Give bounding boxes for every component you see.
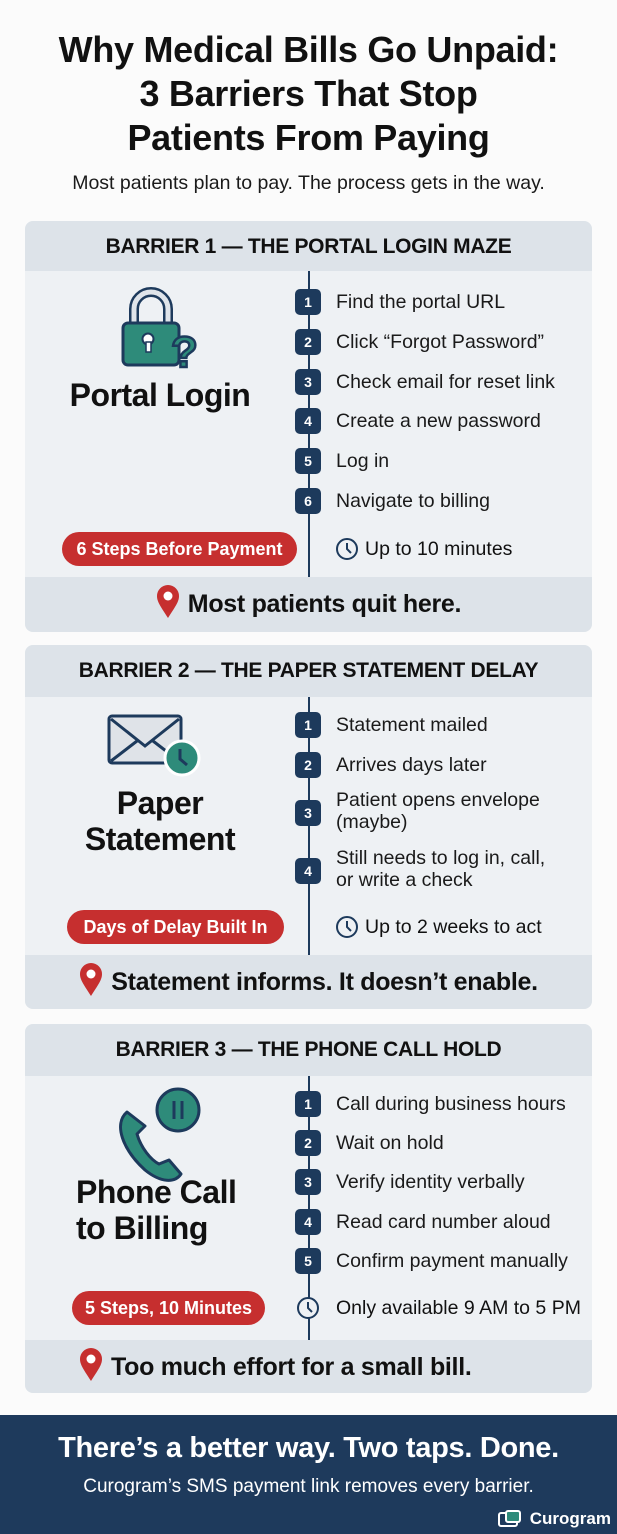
steps list: Confirm payment manually [336, 1250, 568, 1272]
steps list: 5 [304, 453, 312, 469]
heading: barrier 1 [25, 221, 592, 271]
steps list: Click “Forgot Password” [336, 331, 544, 353]
panel: barrier 1 [25, 221, 592, 632]
steps list [295, 712, 545, 891]
steps list: Read card number aloud [336, 1211, 551, 1233]
subtitle: Most patients plan to pay. The process gets in the way. [72, 172, 545, 194]
steps list: Check email for reset link [336, 371, 555, 393]
steps list: 3 [304, 1174, 312, 1190]
title: 3 Barriers That Stop [139, 73, 478, 114]
steps list: Still needs to log in, call, [336, 847, 545, 869]
panel: barrier 3: Only available 9 AM to 5 PM [336, 1297, 581, 1319]
steps list: Verify identity verbally [336, 1171, 525, 1193]
steps list: 4 [304, 413, 312, 429]
label: Paper Statement: Paper [117, 785, 203, 821]
label: Phone Call to Billing: Phone Call [76, 1174, 236, 1210]
steps list: Call during business hours [336, 1093, 566, 1115]
footer: too much effort [25, 1340, 592, 1393]
steps list: Navigate to billing [336, 490, 490, 512]
steps list: Create a new password [336, 410, 541, 432]
footer headline: There’s a better way. Two taps. Done. [58, 1432, 559, 1464]
icon: phone with pause [119, 1088, 200, 1182]
panel: barrier 2: Up to 2 weeks to act [365, 916, 542, 938]
steps list [295, 1091, 568, 1274]
footer: statement informs [25, 955, 592, 1009]
steps list: 2 [304, 757, 312, 773]
steps list [295, 289, 555, 514]
pill: days of delay [67, 910, 284, 944]
heading: barrier 1: BARRIER 1 — THE PORTAL LOGIN MAZE [106, 235, 511, 258]
steps list: 3 [304, 374, 312, 390]
heading: barrier 3 [25, 1024, 592, 1076]
pill: 5 steps [72, 1291, 265, 1325]
panel: barrier 2 [25, 645, 592, 1009]
footer: quit here: Most patients quit here. [188, 590, 461, 618]
pill: 6 steps: 6 Steps Before Payment [76, 539, 283, 559]
steps list: 6 [304, 493, 312, 509]
steps list: 3 [304, 805, 312, 821]
footer banner [0, 1415, 617, 1534]
label: Paper Statement: Statement [85, 821, 235, 857]
steps list: 2 [304, 334, 312, 350]
steps list: Statement mailed [336, 714, 488, 736]
steps list: 4 [304, 1214, 312, 1230]
heading: barrier 3: BARRIER 3 — THE PHONE CALL HOLD [116, 1038, 501, 1061]
heading: barrier 2: BARRIER 2 — THE PAPER STATEMENT DELAY [79, 659, 538, 682]
footer: statement informs: Statement informs. It doesn’t enable. [111, 968, 538, 996]
panel: barrier 1: Up to 10 minutes [365, 538, 512, 560]
title: Patients From Paying [127, 117, 490, 158]
label: Phone Call to Billing: to Billing [76, 1210, 208, 1246]
pill: days of delay: Days of Delay Built In [83, 917, 268, 937]
panel: barrier 3 [25, 1024, 592, 1393]
steps list: 1 [304, 1096, 312, 1112]
icon: envelope with clock [108, 714, 200, 776]
footer: too much effort: Too much effort for a small bill. [111, 1353, 472, 1381]
steps list: 1 [304, 717, 312, 733]
icon: padlock with question mark [122, 287, 198, 371]
steps list: 1 [304, 294, 312, 310]
steps list: Patient opens envelope [336, 789, 540, 811]
steps list: 4 [304, 863, 312, 879]
label: Portal Login: Portal Login [70, 377, 250, 413]
steps list: Arrives days later [336, 754, 487, 776]
heading: barrier 2 [25, 645, 592, 697]
title: Why Medical Bills Go Unpaid: [59, 29, 558, 70]
time note [336, 916, 542, 938]
steps list: 2 [304, 1135, 312, 1151]
label: Phone Call to Billing [76, 1174, 236, 1246]
label: Paper Statement [85, 785, 236, 857]
time note [297, 1297, 581, 1319]
time note [336, 538, 512, 560]
footer subtitle: Curogram’s SMS payment link removes every barrier. [83, 1476, 534, 1497]
title [58, 29, 558, 158]
pill: 6 steps [62, 532, 297, 566]
steps list: (maybe) [336, 811, 408, 833]
steps list: or write a check [336, 869, 473, 891]
logo: Curogram: Curogram [530, 1509, 611, 1528]
steps list: 5 [304, 1253, 312, 1269]
steps list: Log in [336, 450, 389, 472]
pill: 5 steps: 5 Steps, 10 Minutes [85, 1298, 252, 1318]
steps list: Wait on hold [336, 1132, 444, 1154]
footer: quit here [25, 577, 592, 632]
steps list: Find the portal URL [336, 291, 505, 313]
